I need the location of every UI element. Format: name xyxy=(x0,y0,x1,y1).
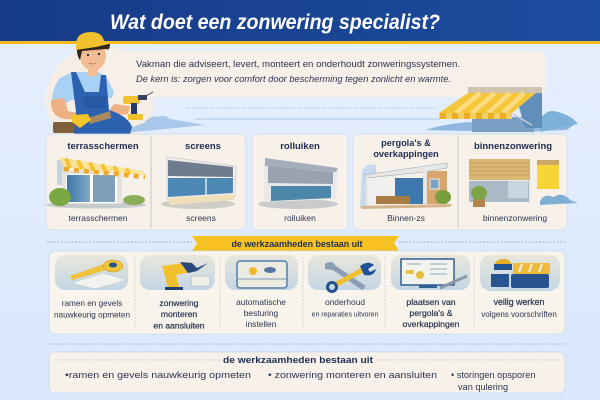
heading: pergola's & overkappingen: pergola's & xyxy=(381,138,431,148)
task: pergola planning xyxy=(391,255,470,329)
bullet 3 xyxy=(451,370,535,392)
label: screens: screens xyxy=(186,213,216,223)
text: monteren xyxy=(161,309,197,319)
banner: de werkzaamheden bestaan uit: de werkzaamheden bestaan uit xyxy=(232,239,363,250)
text: nauwkeurig opmeten xyxy=(54,310,130,320)
icon: worker with drill xyxy=(51,32,205,134)
task: measuring xyxy=(54,255,130,320)
image: screens window xyxy=(161,157,236,209)
bullet 3: • storingen opsporen xyxy=(451,370,535,380)
intro line 2: De kern is: zorgen voor comfort door bescherming tegen zonlicht en warmte. xyxy=(136,74,451,84)
label: terrasschermen: terrasschermen xyxy=(68,213,128,223)
bullet 3: van qulering xyxy=(458,382,508,392)
task: automation xyxy=(225,255,298,329)
panel: tasks xyxy=(49,251,565,334)
heading: binnenzonwering: binnenzonwering xyxy=(474,141,552,152)
text: ramen en gevels xyxy=(62,299,122,308)
heading: rolluiken: rolluiken xyxy=(280,141,320,152)
panel: card rolluiken xyxy=(252,134,348,230)
bullet 2: • zonwering monteren en aansluiten xyxy=(268,369,437,380)
task: safe work xyxy=(480,255,560,319)
label: binnenzonwering: binnenzonwering xyxy=(483,213,547,223)
summary heading: de werkzaamheden bestaan uit xyxy=(223,355,374,366)
text: volgens voorschriften xyxy=(481,310,557,319)
text: pergola's & xyxy=(409,308,453,318)
bullet 1: •ramen en gevels nauwkeurig opmeten xyxy=(65,369,251,380)
image: indoor blinds xyxy=(469,159,578,207)
banner: de werkzaamheden bestaan uit xyxy=(192,236,399,251)
image: terrace awning xyxy=(46,157,146,208)
panel: intro xyxy=(105,51,545,97)
text: plaatsen van xyxy=(406,297,456,307)
text: overkappingen xyxy=(402,319,460,329)
text: en reparaties uitvoren xyxy=(312,312,378,318)
icon: awning on house xyxy=(425,87,578,132)
text: en aansluiten xyxy=(153,320,205,330)
intro line 1: Vakman die adviseert, levert, monteert en onderhoudt zonweringssystemen. xyxy=(136,59,460,69)
heading: screens: screens xyxy=(185,141,221,152)
panel: summary xyxy=(49,352,565,393)
text: zonwering xyxy=(159,298,199,308)
header band xyxy=(0,0,600,44)
text: onderhoud xyxy=(325,297,365,307)
heading: pergola's & overkappingen: overkappingen xyxy=(373,149,439,159)
task: maintenance xyxy=(308,255,381,318)
image: pergola xyxy=(360,163,452,209)
decorative glow behind worker xyxy=(46,46,154,154)
heading: terrasschermen: terrasschermen xyxy=(67,141,139,152)
task: mounting xyxy=(140,255,215,330)
label: Binnen-zs: Binnen-zs xyxy=(387,213,425,223)
panel: card pergola and binnenzonwering xyxy=(353,134,578,230)
title: Wat doet een zonwering specialist? xyxy=(110,10,440,34)
text: besturing xyxy=(244,308,279,318)
text: automatische xyxy=(236,297,286,307)
label: rolluiken: rolluiken xyxy=(284,213,316,223)
image: roller shutter xyxy=(258,158,338,209)
panel: card terrasschermen and screens xyxy=(46,134,246,230)
text: instellen xyxy=(246,319,277,329)
text: veilig werken xyxy=(494,297,545,307)
